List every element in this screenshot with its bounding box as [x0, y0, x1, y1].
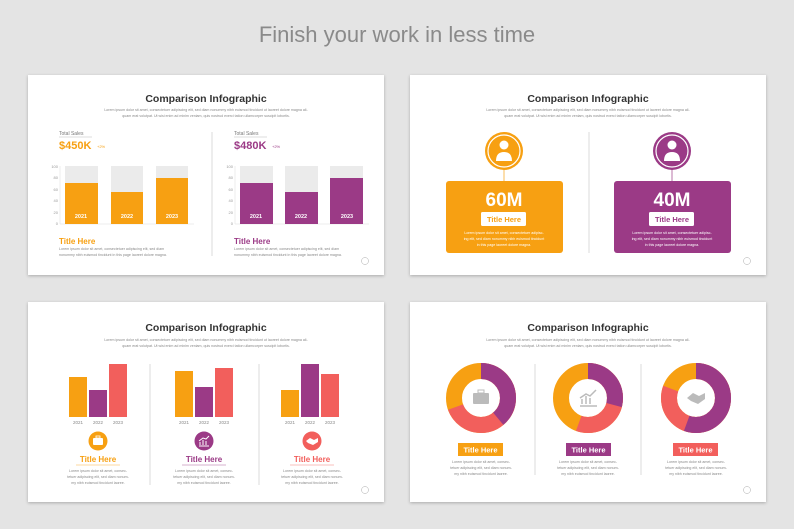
panel: three bar charts: 2023 — [113, 420, 124, 425]
panel: donut charts: Title Here — [463, 446, 498, 454]
panel: people comparison: Title Here — [655, 215, 689, 224]
panel: bar chart comparison: Lorem ipsum dolor sit amet, consectetuer adipiscing elit, sed diam nonummy nibh euismod tincidunt ut laoreet dolore magna ali- — [104, 108, 308, 112]
panel: three bar charts: my nibh euismod tincidunt laoree. — [177, 481, 231, 485]
panel: three bar charts: 2023 — [325, 420, 336, 425]
panel: bar chart comparison: 2022 — [121, 214, 133, 220]
panel: bar chart comparison: 2022 — [295, 214, 307, 220]
panel: bar chart comparison: 0 — [231, 221, 234, 226]
panel: donut charts: Lorem ipsum dolor sit amet, consectetuer adipiscing elit, sed diam nonummy nibh euismod tincidunt ut laoreet dolore magna ali- — [486, 338, 690, 342]
panel: bar chart comparison: 40 — [54, 198, 59, 203]
panel: three bar charts: Lorem ipsum dolor sit amet, consec- — [69, 469, 128, 473]
panel: three bar charts: 2021 — [285, 420, 296, 425]
panel: three bar charts: Title Here — [186, 455, 223, 464]
panel: bar chart comparison: 100 — [226, 164, 234, 169]
panel: three bar charts: 2021 — [179, 420, 190, 425]
panel: bar chart comparison: nonummy nibh euismod tincidunt in this page laoreet dolore magna. — [234, 253, 342, 257]
panel: people comparison: in this page laoreet dolore magna. — [477, 243, 531, 247]
panel: people comparison: Lorem ipsum dolor sit amet, consectetuer adipiscing elit, sed diam nonummy nibh euismod tincidunt ut laoreet dolore magna ali- — [486, 108, 690, 112]
panel: donut charts: tetuer adipiscing elit, sed diam nonum- — [557, 466, 620, 470]
main heading: Finish your work in less time — [259, 22, 535, 47]
panel: donut charts: quam erat volutpat. Ut wisi enim ad minim veniam, quis nostrud exerci tation ullamcorper suscipit lobortis. — [504, 344, 672, 348]
panel: bar chart comparison: Lorem ipsum dolor sit amet, consectetuer adipiscing elit, sed diam — [59, 247, 164, 251]
panel: donut charts: Lorem ipsum dolor sit amet, consec- — [559, 460, 618, 464]
panel: donut charts: my nibh euismod tincidunt laoree. — [454, 472, 508, 476]
panel: donut charts: Lorem ipsum dolor sit amet, consec- — [667, 460, 726, 464]
panel: three bar charts: my nibh euismod tincidunt laoree. — [285, 481, 339, 485]
panel: bar chart comparison: quam erat volutpat. Ut wisi enim ad minim veniam, quis nostrud exerci tation ullamcorper suscipit lobortis. — [122, 114, 290, 118]
panel: bar chart comparison: 80 — [229, 175, 234, 180]
panel: donut charts: my nibh euismod tincidunt laoree. — [561, 472, 615, 476]
panel: bar chart comparison: +2% — [272, 144, 281, 149]
panel: donut charts: my nibh euismod tincidunt laoree. — [669, 472, 723, 476]
panel: bar chart comparison: 20 — [229, 210, 234, 215]
panel: donut charts: Title Here — [571, 446, 606, 454]
panel: bar chart comparison: 60 — [229, 187, 234, 192]
panel: three bar charts: tetuer adipiscing elit, sed diam nonum- — [281, 475, 344, 479]
panel: three bar charts: 2022 — [199, 420, 210, 425]
panel: bar chart comparison — [28, 75, 384, 275]
panel: bar chart comparison: 40 — [229, 198, 234, 203]
panel: three bar charts: Lorem ipsum dolor sit amet, consec- — [175, 469, 234, 473]
panel: three bar charts: Lorem ipsum dolor sit amet, consec- — [283, 469, 342, 473]
panel: donut charts: tetuer adipiscing elit, sed diam nonum- — [665, 466, 728, 470]
panel: people comparison: Title Here — [487, 215, 521, 224]
panel: bar chart comparison: 2023 — [341, 214, 353, 220]
panel: bar chart comparison: Total Sales — [59, 131, 84, 137]
C = 169.65 — [454, 371, 508, 425]
panel: bar chart comparison: 0 — [56, 221, 59, 226]
panel: three bar charts: quam erat volutpat. Ut wisi enim ad minim veniam, quis nostrud exerci tation ullamcorper suscipit lobortis. — [122, 344, 290, 348]
panel: three bar charts: Lorem ipsum dolor sit amet, consectetuer adipiscing elit, sed diam nonummy nibh euismod tincidunt ut laoreet dolore magna ali- — [104, 338, 308, 342]
panel: bar chart comparison: Lorem ipsum dolor sit amet, consectetuer adipiscing elit, sed diam — [234, 247, 339, 251]
panel: bar chart comparison: 2021 — [75, 214, 87, 220]
panel: people comparison: Lorem ipsum dolor sit amet, consectetuer adipisc- — [464, 231, 544, 235]
panel: people comparison: ing elit, sed diam nonummy nibh euismod tincidunt — [632, 237, 712, 241]
panel: bar chart comparison: +2% — [97, 144, 106, 149]
panel: bar chart comparison: 2023 — [166, 214, 178, 220]
panel: donut charts: Lorem ipsum dolor sit amet, consec- — [452, 460, 511, 464]
panel: people comparison: Lorem ipsum dolor sit amet, consectetuer adipisc- — [632, 231, 712, 235]
panel: three bar charts: 2021 — [73, 420, 84, 425]
panel: people comparison: ing elit, sed diam nonummy nibh euismod tincidunt — [464, 237, 544, 241]
panel: bar chart comparison: Comparison Infographic — [145, 93, 267, 105]
panel: people comparison: quam erat volutpat. Ut wisi enim ad minim veniam, quis nostrud exerci tation ullamcorper suscipit lobortis. — [504, 114, 672, 118]
panel: bar chart comparison: 80 — [54, 175, 59, 180]
panel: three bar charts: Comparison Infographic — [145, 322, 267, 334]
panel: bar chart comparison: 100 — [51, 164, 59, 169]
panel: bar chart comparison: nonummy nibh euismod tincidunt in this page laoreet dolore magna. — [59, 253, 167, 257]
panel: people comparison: in this page laoreet dolore magna. — [645, 243, 699, 247]
panel: bar chart comparison: Total Sales — [234, 131, 259, 137]
panel: three bar charts: 2023 — [219, 420, 230, 425]
panel: three bar charts: tetuer adipiscing elit, sed diam nonum- — [173, 475, 236, 479]
panel: bar chart comparison: Title Here — [59, 237, 96, 246]
panel: bar chart comparison: 2021 — [250, 214, 262, 220]
panel: donut charts: Comparison Infographic — [527, 322, 649, 334]
panel: three bar charts: 2022 — [305, 420, 316, 425]
panel: people comparison: 60M — [486, 190, 522, 211]
panel: three bar charts: my nibh euismod tincidunt laoree. — [71, 481, 125, 485]
panel: bar chart comparison: $450K — [59, 140, 91, 152]
panel: donut charts: Title Here — [678, 446, 713, 454]
panel: three bar charts: Title Here — [80, 455, 117, 464]
panel: three bar charts: Title Here — [294, 455, 331, 464]
panel: three bar charts: tetuer adipiscing elit, sed diam nonum- — [67, 475, 130, 479]
panel: bar chart comparison: Title Here — [234, 237, 271, 246]
panel: people comparison: 40M — [654, 190, 690, 211]
panel: donut charts — [410, 302, 766, 502]
panel: bar chart comparison: 60 — [54, 187, 59, 192]
panel: bar chart comparison: 20 — [54, 210, 59, 215]
panel: three bar charts — [28, 302, 384, 502]
panel: people comparison — [410, 75, 766, 275]
panel: people comparison: Comparison Infographic — [527, 93, 649, 105]
panel: bar chart comparison: $480K — [234, 140, 266, 152]
panel: donut charts: tetuer adipiscing elit, sed diam nonum- — [450, 466, 513, 470]
panel: three bar charts: 2022 — [93, 420, 104, 425]
